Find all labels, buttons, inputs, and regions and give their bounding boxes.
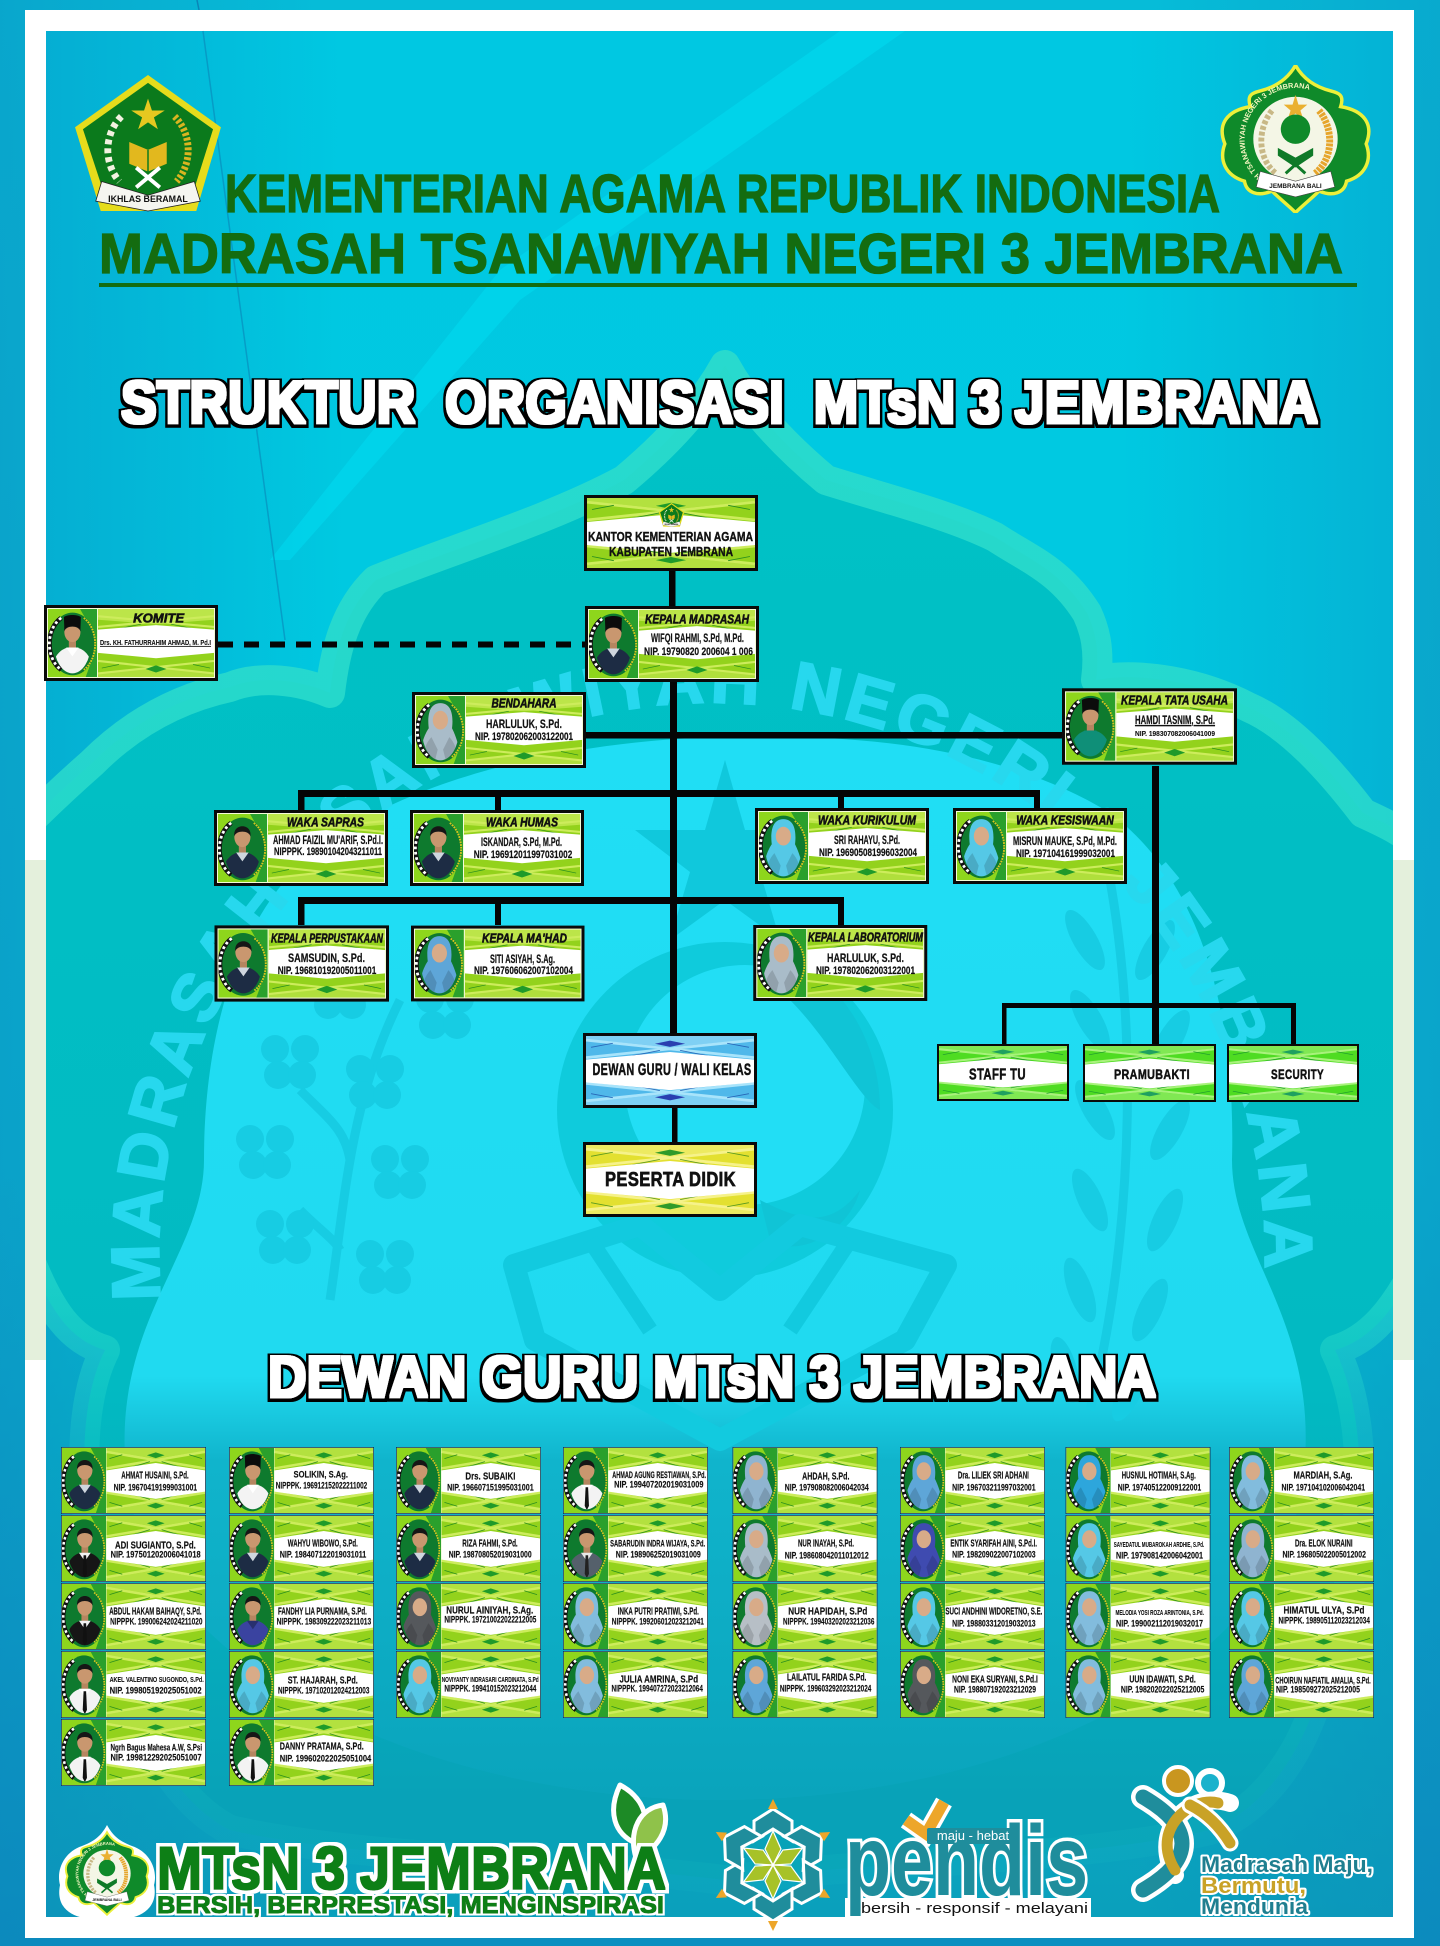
- teacher card: Himatul Ulya: HIMATUL ULYA, S.Pd: [1284, 1604, 1364, 1616]
- teacher card: Elok Nuraini: Dra. ELOK NURAINI: [1295, 1538, 1353, 1550]
- card: Kepala Perpustakaan: [214, 925, 389, 1002]
- footer icon: Pendis flower: [706, 1799, 840, 1931]
- teacher card: Nur Hapidah: NUR HAPIDAH, S.Pd: [788, 1606, 867, 1618]
- teacher card: Sayedatul Mubarokah Ardhie: SAYEDATUL MUBAROKAH ARDHIE, S.Pd.: [1114, 1540, 1204, 1549]
- teacher card: Julia Amrina: JULIA AMRINA, S.Pd: [620, 1674, 698, 1686]
- footer slogan: Madrasah Maju, Bermutu, Mendunia: Madrasah Maju,: [1201, 1852, 1373, 1877]
- teacher card: Elok Nuraini: NIP. 196805022005012002: [1282, 1550, 1366, 1560]
- teacher card: Nur Inayah: NIP. 198608042011012012: [785, 1550, 869, 1562]
- teacher card: Fandhy Lia Purnama: FANDHY LIA PURNAMA, S.Pd.: [278, 1606, 367, 1618]
- card: Bendahara: BENDAHARA: [492, 696, 556, 710]
- teacher card: Lailatul Farida: LAILATUL FARIDA S.Pd.: [787, 1672, 867, 1684]
- footer logo: Pendis: maju - hebat: [937, 1828, 1010, 1843]
- teacher card: Solikin: NIPPPK. 196912152022211002: [276, 1480, 367, 1492]
- logo: MTsN 3 Jembrana crest: [1222, 65, 1369, 213]
- footer logo: MTsN crest: [59, 1825, 155, 1918]
- card: Waka Kurikulum: SRI RAHAYU, S.Pd.: [834, 833, 900, 847]
- teacher card: St. Hajarah: ST. HAJARAH, S.Pd.: [288, 1674, 358, 1686]
- card: Kepala Laboratorium: NIP. 197802062003122001: [816, 965, 915, 977]
- card: Kepala Laboratorium: HARLULUK, S.Pd.: [827, 951, 904, 965]
- title: Struktur Organisasi: STRUKTUR ORGANISASI MTsN 3 JEMBRANA: [121, 369, 1318, 436]
- teacher card: Ahmad Agung Restiawan: AHMAD AGUNG RESTIAWAN, S.Pd.: [612, 1470, 706, 1481]
- footer slogan: Madrasah Maju, Bermutu, Mendunia: [1201, 1852, 1373, 1919]
- header rule: [99, 283, 1357, 287]
- card: Kepala Madrasah: NIP. 19790820 200604 1 006: [644, 646, 753, 658]
- card: Waka Kesiswaan: NIP. 197104161999032001: [1016, 848, 1115, 860]
- teacher card: Uun Idawati: UUN IDAWATI, S.Pd.: [1129, 1674, 1196, 1686]
- teacher card: St. Hajarah: [229, 1651, 374, 1718]
- box: Peserta Didik: [583, 1142, 757, 1217]
- card: Waka Kurikulum: NIP. 196905081996032004: [819, 847, 918, 859]
- teacher card: Mardiah: NIP. 197104102006042041: [1282, 1482, 1366, 1494]
- teacher card: Abdul Hakam Baihaqy: [61, 1583, 206, 1650]
- box: Security: [1227, 1044, 1359, 1102]
- card: Kepala Tata Usaha: KEPALA TATA USAHA: [1121, 694, 1228, 708]
- teacher card: Ahmat Husaini: AHMAT HUSAINI, S.Pd.: [121, 1470, 189, 1482]
- teacher card: Danny Pratama: DANNY PRATAMA, S.Pd.: [280, 1740, 364, 1752]
- footer logo: Pendis: pendis: [845, 1805, 1088, 1917]
- background watermark: school crest: MADRASAH TSANAWIYAH NEGERI 3 JEMBRANA: [110, 661, 1313, 1298]
- card: Bendahara: NIP. 197802062003122001: [475, 731, 573, 743]
- teacher card: Choirun Nafiatil Amalia: CHOIRUN NAFIATIL AMALIA, S.Pd.: [1275, 1676, 1371, 1686]
- teacher card: Julia Amrina: [563, 1651, 708, 1718]
- teacher card: Lailatul Farida: NIPPPK. 199603292023212024: [780, 1684, 872, 1694]
- teacher card: Fandhy Lia Purnama: [229, 1583, 374, 1650]
- teacher card: Ahmad Agung Restiawan: NIP. 199407202019031009: [614, 1480, 703, 1490]
- teacher card: Ahmad Agung Restiawan: [563, 1447, 708, 1514]
- teacher card: Uun Idawati: NIP. 198202022025212005: [1121, 1684, 1205, 1696]
- teacher card: Noni Eka Suryani: [900, 1651, 1045, 1718]
- footer logo: Madrasah Maju figure: [1143, 1767, 1230, 1890]
- card: Kantor Kementerian Agama: KABUPATEN JEMBRANA: [609, 544, 733, 559]
- teacher card: Abdul Hakam Baihaqy: NIPPPK. 199006242024211020: [110, 1616, 202, 1628]
- teacher card: Mardiah: MARDIAH, S.Ag.: [1294, 1470, 1353, 1482]
- card: Kepala Ma'had: NIP. 197606062007102004: [474, 965, 574, 977]
- card: Bendahara: HARLULUK, S.Pd.: [486, 717, 562, 731]
- box: Staff TU: STAFF TU: [969, 1066, 1026, 1084]
- teacher card: Inka Putri Pratiwi: INKA PUTRI PRATIWI, S.Pd.: [618, 1606, 699, 1618]
- card: Waka Kesiswaan: [953, 808, 1127, 884]
- teacher card: Riza Fahmi: RIZA FAHMI, S.Pd.: [462, 1538, 518, 1550]
- teacher card: Sabarudin Indra Wijaya: [563, 1515, 708, 1582]
- card: Waka Kesiswaan: MISRUN MAUKE, S.Pd, M.Pd.: [1013, 834, 1117, 848]
- teacher card: Fandhy Lia Purnama: NIPPPK. 198309222023211013: [277, 1616, 371, 1628]
- card: Kepala Ma'had: KEPALA MA'HAD: [482, 932, 567, 946]
- logo: Kementerian Agama crest: [75, 75, 221, 211]
- teacher card: Adi Sugianto: [61, 1515, 206, 1582]
- teacher card: Melodia Yosi Roza Arintonia: MELODIA YOSI ROZA ARINTONIA, S.Pd.: [1116, 1608, 1204, 1617]
- footer slogan: Madrasah Maju, Bermutu, Mendunia: Bermutu,: [1201, 1873, 1306, 1898]
- box: Pramubakti: PRAMUBAKTI: [1114, 1067, 1190, 1082]
- teacher card: Liliek Sri Adhani: Dra. LILIEK SRI ADHANI: [958, 1470, 1029, 1482]
- teacher card: Danny Pratama: NIP. 199602022025051004: [280, 1754, 372, 1764]
- card: Kepala Ma'had: [411, 926, 584, 1001]
- teacher card: Choirun Nafiatil Amalia: NIP. 198509272025212005: [1276, 1684, 1361, 1696]
- teacher card: Elok Nuraini: [1229, 1515, 1374, 1582]
- card: Waka Sapras: [214, 810, 388, 886]
- teacher card: Entik Syarifah Aini: [900, 1515, 1045, 1582]
- teacher card: Julia Amrina: NIPPPK. 199407272023212064: [611, 1684, 703, 1694]
- teacher card: Ahmat Husaini: NIP. 196704191999031001: [114, 1482, 198, 1494]
- teacher card: Ahdah: AHDAH, S.Pd.: [802, 1470, 849, 1482]
- box: Staff TU: [937, 1044, 1069, 1101]
- teacher card: Adi Sugianto: ADI SUGIANTO, S.Pd.: [115, 1540, 196, 1552]
- teacher card: Solikin: SOLIKIN, S.Ag.: [294, 1470, 348, 1480]
- teacher card: Sabarudin Indra Wijaya: NIP. 198906252019031009: [616, 1550, 701, 1560]
- card: Kepala Madrasah: WIFQI RAHMI, S.Pd, M.Pd.: [651, 631, 744, 645]
- teacher card: Ahdah: [732, 1447, 878, 1514]
- card: Waka Sapras: NIPPPK. 198901042043211011: [274, 846, 382, 858]
- teacher card: Wahyu Wibowo: NIP. 198407122019031011: [280, 1550, 367, 1560]
- card: Kepala Perpustakaan: KEPALA PERPUSTAKAAN: [271, 932, 384, 946]
- card: Kepala Madrasah: [585, 606, 759, 682]
- teacher card: Ngrh Bagus Mahesa: Ngrh Bagus Mahesa A.W, S.Psi: [111, 1742, 202, 1754]
- teacher card: Liliek Sri Adhani: [900, 1447, 1045, 1514]
- card: Waka Sapras: WAKA SAPRAS: [287, 816, 365, 830]
- teacher card: Noviyanty Indrasari Cardinata: [396, 1651, 541, 1718]
- card: Kepala Tata Usaha: HAMDI TASNIM, S.Pd.: [1135, 713, 1215, 727]
- teacher card: Himatul Ulya: NIPPPK. 198905112023212034: [1278, 1616, 1370, 1626]
- teacher card: Riza Fahmi: NIP. 198708052019031000: [449, 1550, 532, 1560]
- footer slogan: Madrasah Maju, Bermutu, Mendunia: Mendunia: [1201, 1894, 1309, 1919]
- teacher card: Drs. Subaiki: Drs. SUBAIKI: [465, 1470, 515, 1482]
- card: Waka Humas: [410, 810, 584, 886]
- box: Security: SECURITY: [1271, 1067, 1324, 1082]
- teacher card: Mardiah: [1229, 1447, 1374, 1514]
- teacher card: Noni Eka Suryani: NONI EKA SURYANI, S.Pd.I: [952, 1674, 1038, 1686]
- teacher card: Ahmat Husaini: [61, 1447, 206, 1514]
- teacher card: Danny Pratama: [229, 1719, 374, 1786]
- teacher card: Abdul Hakam Baihaqy: ABDUL HAKAM BAIHAQY, S.Pd.: [109, 1606, 202, 1618]
- title: Dewan Guru: DEWAN GURU MTsN 3 JEMBRANA: [268, 1345, 1156, 1410]
- teacher card: Noviyanty Indrasari Cardinata: NIPPPK. 199410152023212044: [444, 1684, 537, 1694]
- teacher card: Entik Syarifah Aini: NIP. 198209022007102003: [952, 1550, 1036, 1560]
- teacher card: Sabarudin Indra Wijaya: SABARUDIN INDRA WIJAYA, S.Pd.: [610, 1538, 705, 1550]
- card: Waka Humas: ISKANDAR, S.Pd, M.Pd.: [481, 835, 562, 849]
- teacher card: Nurul Ainiyah: NURUL AINIYAH, S.Ag.: [446, 1604, 533, 1616]
- heading: Kementerian Agama Republik Indonesia: KEMENTERIAN AGAMA REPUBLIK INDONESIA: [225, 164, 1220, 224]
- card: Kantor Kementerian Agama: KANTOR KEMENTERIAN AGAMA: [588, 529, 753, 544]
- footer wordmark: MTsN 3 Jembrana: MTsN 3 JEMBRANA: [157, 1835, 666, 1902]
- card: Waka Sapras: AHMAD FAIZIL MU'ARIF, S.Pd.I.: [273, 833, 383, 847]
- card: Kepala Laboratorium: KEPALA LABORATORIUM: [808, 930, 923, 944]
- teacher card: Suci Andhini Widoretno: SUCI ANDHINI WIDORETNO, S.E.: [945, 1606, 1042, 1618]
- teacher card: Wahyu Wibowo: WAHYU WIBOWO, S.Pd.: [288, 1538, 358, 1550]
- teacher card: Nurul Ainiyah: NIPPPK. 197210022022212005: [444, 1614, 537, 1626]
- card: Waka Kurikulum: [755, 808, 929, 884]
- teacher card: Husnul Hotimah: [1066, 1447, 1210, 1514]
- teacher card: Noviyanty Indrasari Cardinata: NOVIYANTY INDRASARI CARDINATA, S.Pd: [442, 1675, 539, 1684]
- teacher card: Ahdah: NIP. 197908082006042034: [785, 1482, 869, 1494]
- card: Kepala Perpustakaan: SAMSUDIN, S.Pd.: [288, 951, 365, 965]
- teacher card: Uun Idawati: [1066, 1651, 1210, 1718]
- teacher card: Solikin: [229, 1447, 374, 1514]
- teacher card: Suci Andhini Widoretno: NIP. 198803312019032013: [952, 1618, 1036, 1630]
- teacher card: Nur Inayah: [732, 1515, 878, 1582]
- teacher card: Riza Fahmi: [396, 1515, 541, 1582]
- card: Kepala Madrasah: KEPALA MADRASAH: [645, 612, 750, 626]
- teacher card: Akel Valentino Sugondo: [61, 1651, 206, 1718]
- teacher card: Choirun Nafiatil Amalia: [1229, 1651, 1374, 1718]
- box: Dewan Guru / Wali Kelas: [583, 1033, 757, 1108]
- teacher card: Lailatul Farida: [732, 1651, 878, 1718]
- teacher card: Liliek Sri Adhani: NIP. 196703211997032001: [952, 1482, 1036, 1494]
- teacher card: Suci Andhini Widoretno: [900, 1583, 1045, 1650]
- teacher card: Inka Putri Pratiwi: NIPPPK. 199206012023212041: [612, 1616, 704, 1628]
- card: Kepala Ma'had: SITI ASIYAH, S.Ag.: [490, 952, 555, 966]
- card: Komite: KOMITE: [133, 612, 185, 626]
- teacher card: Sayedatul Mubarokah Ardhie: [1066, 1515, 1210, 1582]
- footer logo: Pendis: bersih - responsif - melayani: [861, 1900, 1088, 1917]
- org chart connectors: [218, 571, 1296, 1142]
- card: Waka Kurikulum: WAKA KURIKULUM: [818, 814, 916, 828]
- teacher card: St. Hajarah: NIPPPK. 197102012024212003: [278, 1686, 369, 1696]
- card: Kepala Laboratorium: [753, 925, 927, 1001]
- teacher card: Melodia Yosi Roza Arintonia: NIP. 199002112019032017: [1116, 1618, 1203, 1630]
- card: Komite: Drs. KH. FATHURRAHIM AHMAD, M. Pd.I: [100, 638, 211, 647]
- teacher card: Nurul Ainiyah: [396, 1583, 541, 1650]
- teacher card: Nur Hapidah: NIPPPK. 199403202023212036: [783, 1616, 874, 1628]
- box: Dewan Guru / Wali Kelas: DEWAN GURU / WALI KELAS: [592, 1061, 752, 1079]
- teacher card: Akel Valentino Sugondo: NIP. 199805192025051002: [110, 1686, 202, 1696]
- box: Pramubakti: [1083, 1044, 1216, 1102]
- teacher card: Nur Hapidah: [732, 1583, 878, 1650]
- teacher card: Sayedatul Mubarokah Ardhie: NIP. 197908142006042001: [1116, 1550, 1204, 1562]
- teacher card: Husnul Hotimah: HUSNUL HOTIMAH, S.Ag.: [1122, 1470, 1196, 1482]
- teacher card: Husnul Hotimah: NIP. 197405122009122001: [1118, 1482, 1202, 1494]
- card: Komite: [44, 605, 218, 681]
- box: Peserta Didik: PESERTA DIDIK: [605, 1169, 736, 1191]
- teacher card: Wahyu Wibowo: [229, 1515, 374, 1582]
- card: Waka Humas: NIP. 196912011997031002: [474, 849, 572, 861]
- card: Kepala Tata Usaha: NIP. 198307082006041009: [1135, 729, 1215, 738]
- teacher card: Drs. Subaiki: [396, 1447, 541, 1514]
- teacher card: Melodia Yosi Roza Arintonia: [1066, 1583, 1210, 1650]
- card: Kepala Perpustakaan: NIP. 196810192005011001: [278, 965, 376, 977]
- card: Waka Kesiswaan: WAKA KESISWAAN: [1016, 814, 1115, 828]
- teacher card: Nur Inayah: NUR INAYAH, S.Pd.: [798, 1538, 854, 1550]
- teacher card: Entik Syarifah Aini: ENTIK SYARIFAH AINI, S.Pd.I.: [950, 1538, 1037, 1550]
- card: Bendahara: [412, 692, 586, 768]
- teacher card: Ngrh Bagus Mahesa: [61, 1719, 206, 1786]
- teacher card: Drs. Subaiki: NIP. 196607151995031001: [447, 1482, 534, 1494]
- card: Kantor Kementerian Agama: [584, 495, 758, 571]
- teacher card: Adi Sugianto: NIP. 197501202006041018: [111, 1550, 201, 1560]
- background watermark: school crest: [46, 350, 1393, 1826]
- teacher card: Inka Putri Pratiwi: [563, 1583, 708, 1650]
- heading: Madrasah Tsanawiyah Negeri 3 Jembrana: MADRASAH TSANAWIYAH NEGERI 3 JEMBRANA: [99, 222, 1343, 286]
- card: Kepala Tata Usaha: [1062, 688, 1237, 765]
- footer tagline: BERSIH, BERPRESTASI, MENGINSPIRASI: [157, 1892, 664, 1919]
- card: Waka Humas: WAKA HUMAS: [486, 816, 559, 830]
- teacher card: Akel Valentino Sugondo: AKEL VALENTINO SUGONDO, S.Pd.: [110, 1675, 204, 1684]
- teacher card: Noni Eka Suryani: NIP. 198807192023212029: [954, 1684, 1036, 1696]
- teacher card: Ngrh Bagus Mahesa: NIP. 199812292025051007: [110, 1752, 202, 1764]
- footer icon: leaves: [614, 1785, 666, 1858]
- teacher card: Himatul Ulya: [1229, 1583, 1374, 1650]
